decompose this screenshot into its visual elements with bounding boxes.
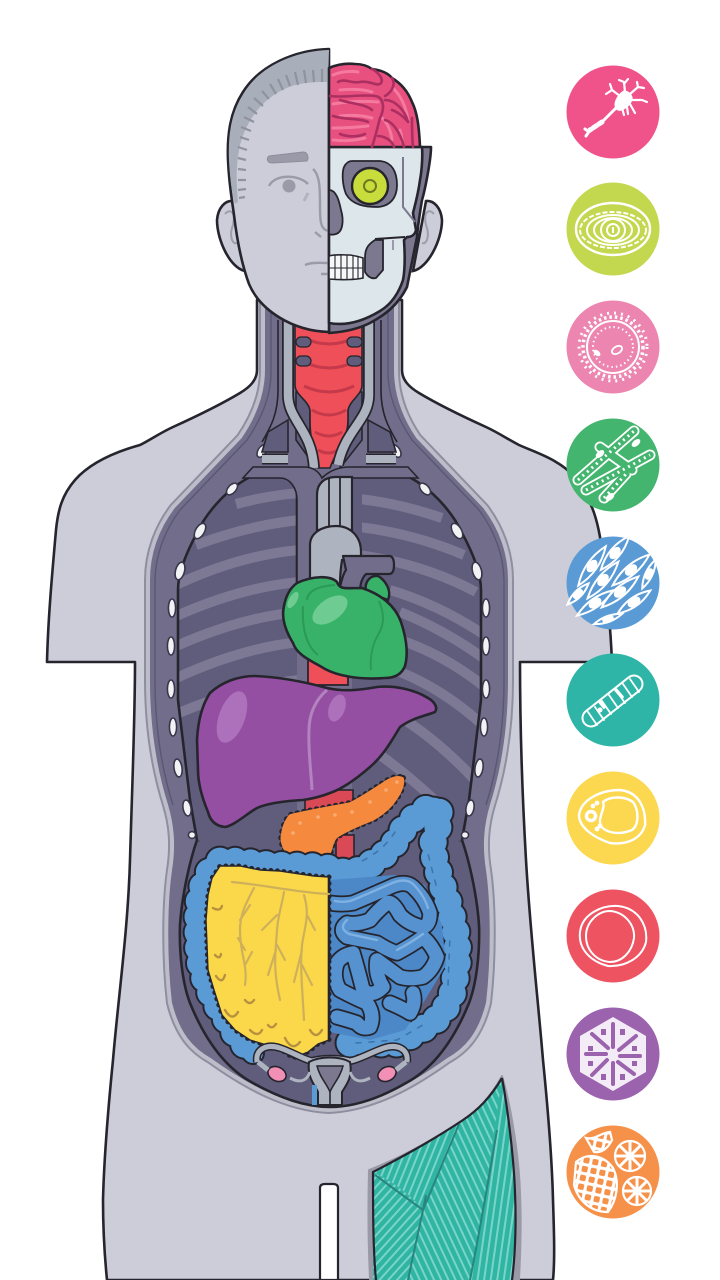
nasal cavity <box>329 190 343 235</box>
large intestine <box>198 807 458 1053</box>
liver lobule circle <box>566 1008 660 1100</box>
adipose tissue <box>206 866 329 1058</box>
liver <box>197 676 436 827</box>
teeth <box>329 255 363 280</box>
great vessels <box>310 477 361 585</box>
spine behind heart <box>308 655 348 685</box>
mouth <box>305 263 329 274</box>
spine lower <box>305 790 354 860</box>
small intestine <box>329 875 446 1040</box>
rib joints <box>167 443 490 838</box>
head <box>217 49 442 333</box>
hair <box>229 50 329 204</box>
groin slot <box>320 1184 338 1280</box>
skull <box>329 147 422 324</box>
body silhouette <box>47 300 612 1280</box>
venous trunk <box>243 467 418 590</box>
nerve fibre circle <box>566 654 660 746</box>
brain <box>329 64 420 147</box>
heart <box>283 576 407 679</box>
nose line <box>313 169 329 237</box>
thigh muscle <box>368 1076 521 1280</box>
body cavity ring <box>148 300 510 1110</box>
left rib cage <box>176 478 297 842</box>
jaw opening <box>365 240 383 278</box>
neck vessels <box>262 320 397 468</box>
eye socket <box>343 161 397 207</box>
pancreas <box>281 777 403 860</box>
left ear <box>217 201 255 271</box>
eye <box>269 177 308 201</box>
gland tissue circle <box>566 1126 660 1218</box>
right rib cage <box>350 477 486 860</box>
cardiac muscle circle <box>566 418 660 512</box>
spine upper <box>295 320 362 468</box>
ovarian follicle circle <box>566 300 660 394</box>
face half <box>228 49 329 332</box>
abdominal cavity <box>180 840 479 1107</box>
red blood cell circle <box>566 890 660 982</box>
neuron circle <box>566 66 660 158</box>
smooth muscle circle <box>565 533 660 630</box>
right ear <box>413 201 442 271</box>
muscle fibre lens circle <box>566 182 660 276</box>
pulmonary artery <box>339 556 394 592</box>
adipocyte circle <box>566 772 660 864</box>
neck behind skull <box>329 147 431 333</box>
uterus and ovaries <box>257 1047 407 1105</box>
eyeball <box>352 168 388 204</box>
upper chest recess <box>262 392 396 468</box>
brow <box>267 152 308 163</box>
